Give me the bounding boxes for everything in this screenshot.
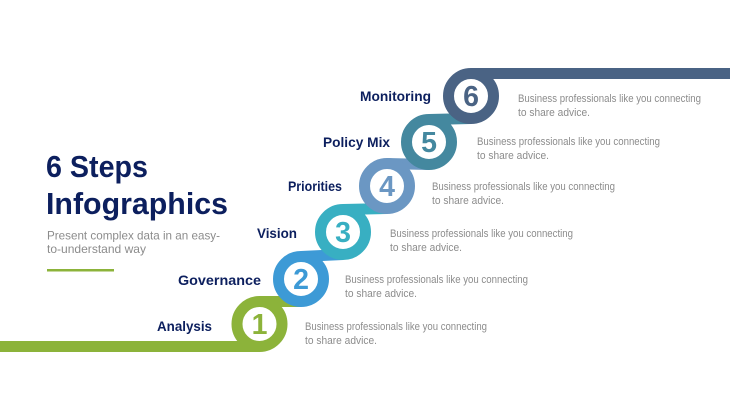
label: Analysis: Analysis bbox=[157, 318, 212, 334]
accent rule bbox=[47, 269, 114, 272]
title: Infographics bbox=[46, 186, 228, 221]
step 5 connector and badge bbox=[406, 118, 471, 164]
label: Vision: Vision bbox=[257, 225, 297, 241]
subtitle: to-understand way bbox=[47, 242, 146, 256]
description: step 6: Business professionals like you connecting bbox=[518, 93, 701, 105]
description: step 1 bbox=[305, 321, 487, 347]
description: step 1: to share advice. bbox=[305, 335, 377, 347]
number 1: 1 bbox=[252, 309, 268, 341]
description: step 2 bbox=[345, 274, 528, 300]
subtitle: Present complex data in an easy- bbox=[47, 228, 220, 242]
step 1 path and badge bbox=[0, 302, 301, 346]
step 2 connector and badge bbox=[278, 254, 343, 302]
description: step 4: to share advice. bbox=[432, 195, 504, 207]
description: step 3 bbox=[390, 228, 573, 254]
description: step 5 bbox=[477, 136, 660, 162]
description: step 5: Business professionals like you connecting bbox=[477, 136, 660, 148]
number 3: 3 bbox=[335, 217, 351, 249]
description: step 1: Business professionals like you connecting bbox=[305, 321, 487, 333]
subtitle bbox=[47, 228, 220, 256]
description: step 3: Business professionals like you connecting bbox=[390, 228, 573, 240]
description: step 6: to share advice. bbox=[518, 107, 590, 119]
number 6: 6 bbox=[463, 81, 479, 113]
number 4: 4 bbox=[379, 171, 395, 203]
number 2: 2 bbox=[293, 264, 309, 296]
title bbox=[46, 149, 228, 221]
description: step 5: to share advice. bbox=[477, 150, 549, 162]
description: step 6 bbox=[518, 93, 701, 119]
title: 6 Steps bbox=[46, 149, 148, 184]
step 6 path and badge bbox=[448, 74, 730, 118]
description: step 2: to share advice. bbox=[345, 288, 417, 300]
label: Priorities: Priorities bbox=[288, 178, 342, 194]
step 4 connector and badge bbox=[364, 164, 429, 208]
step 3 connector and badge bbox=[320, 208, 387, 254]
description: step 4 bbox=[432, 181, 615, 207]
description: step 3: to share advice. bbox=[390, 242, 462, 254]
label: Monitoring: Monitoring bbox=[360, 88, 431, 104]
label: Policy Mix: Policy Mix bbox=[323, 134, 390, 150]
number 5: 5 bbox=[421, 127, 437, 159]
label: Governance: Governance bbox=[178, 272, 261, 288]
description: step 2: Business professionals like you connecting bbox=[345, 274, 528, 286]
description: step 4: Business professionals like you connecting bbox=[432, 181, 615, 193]
